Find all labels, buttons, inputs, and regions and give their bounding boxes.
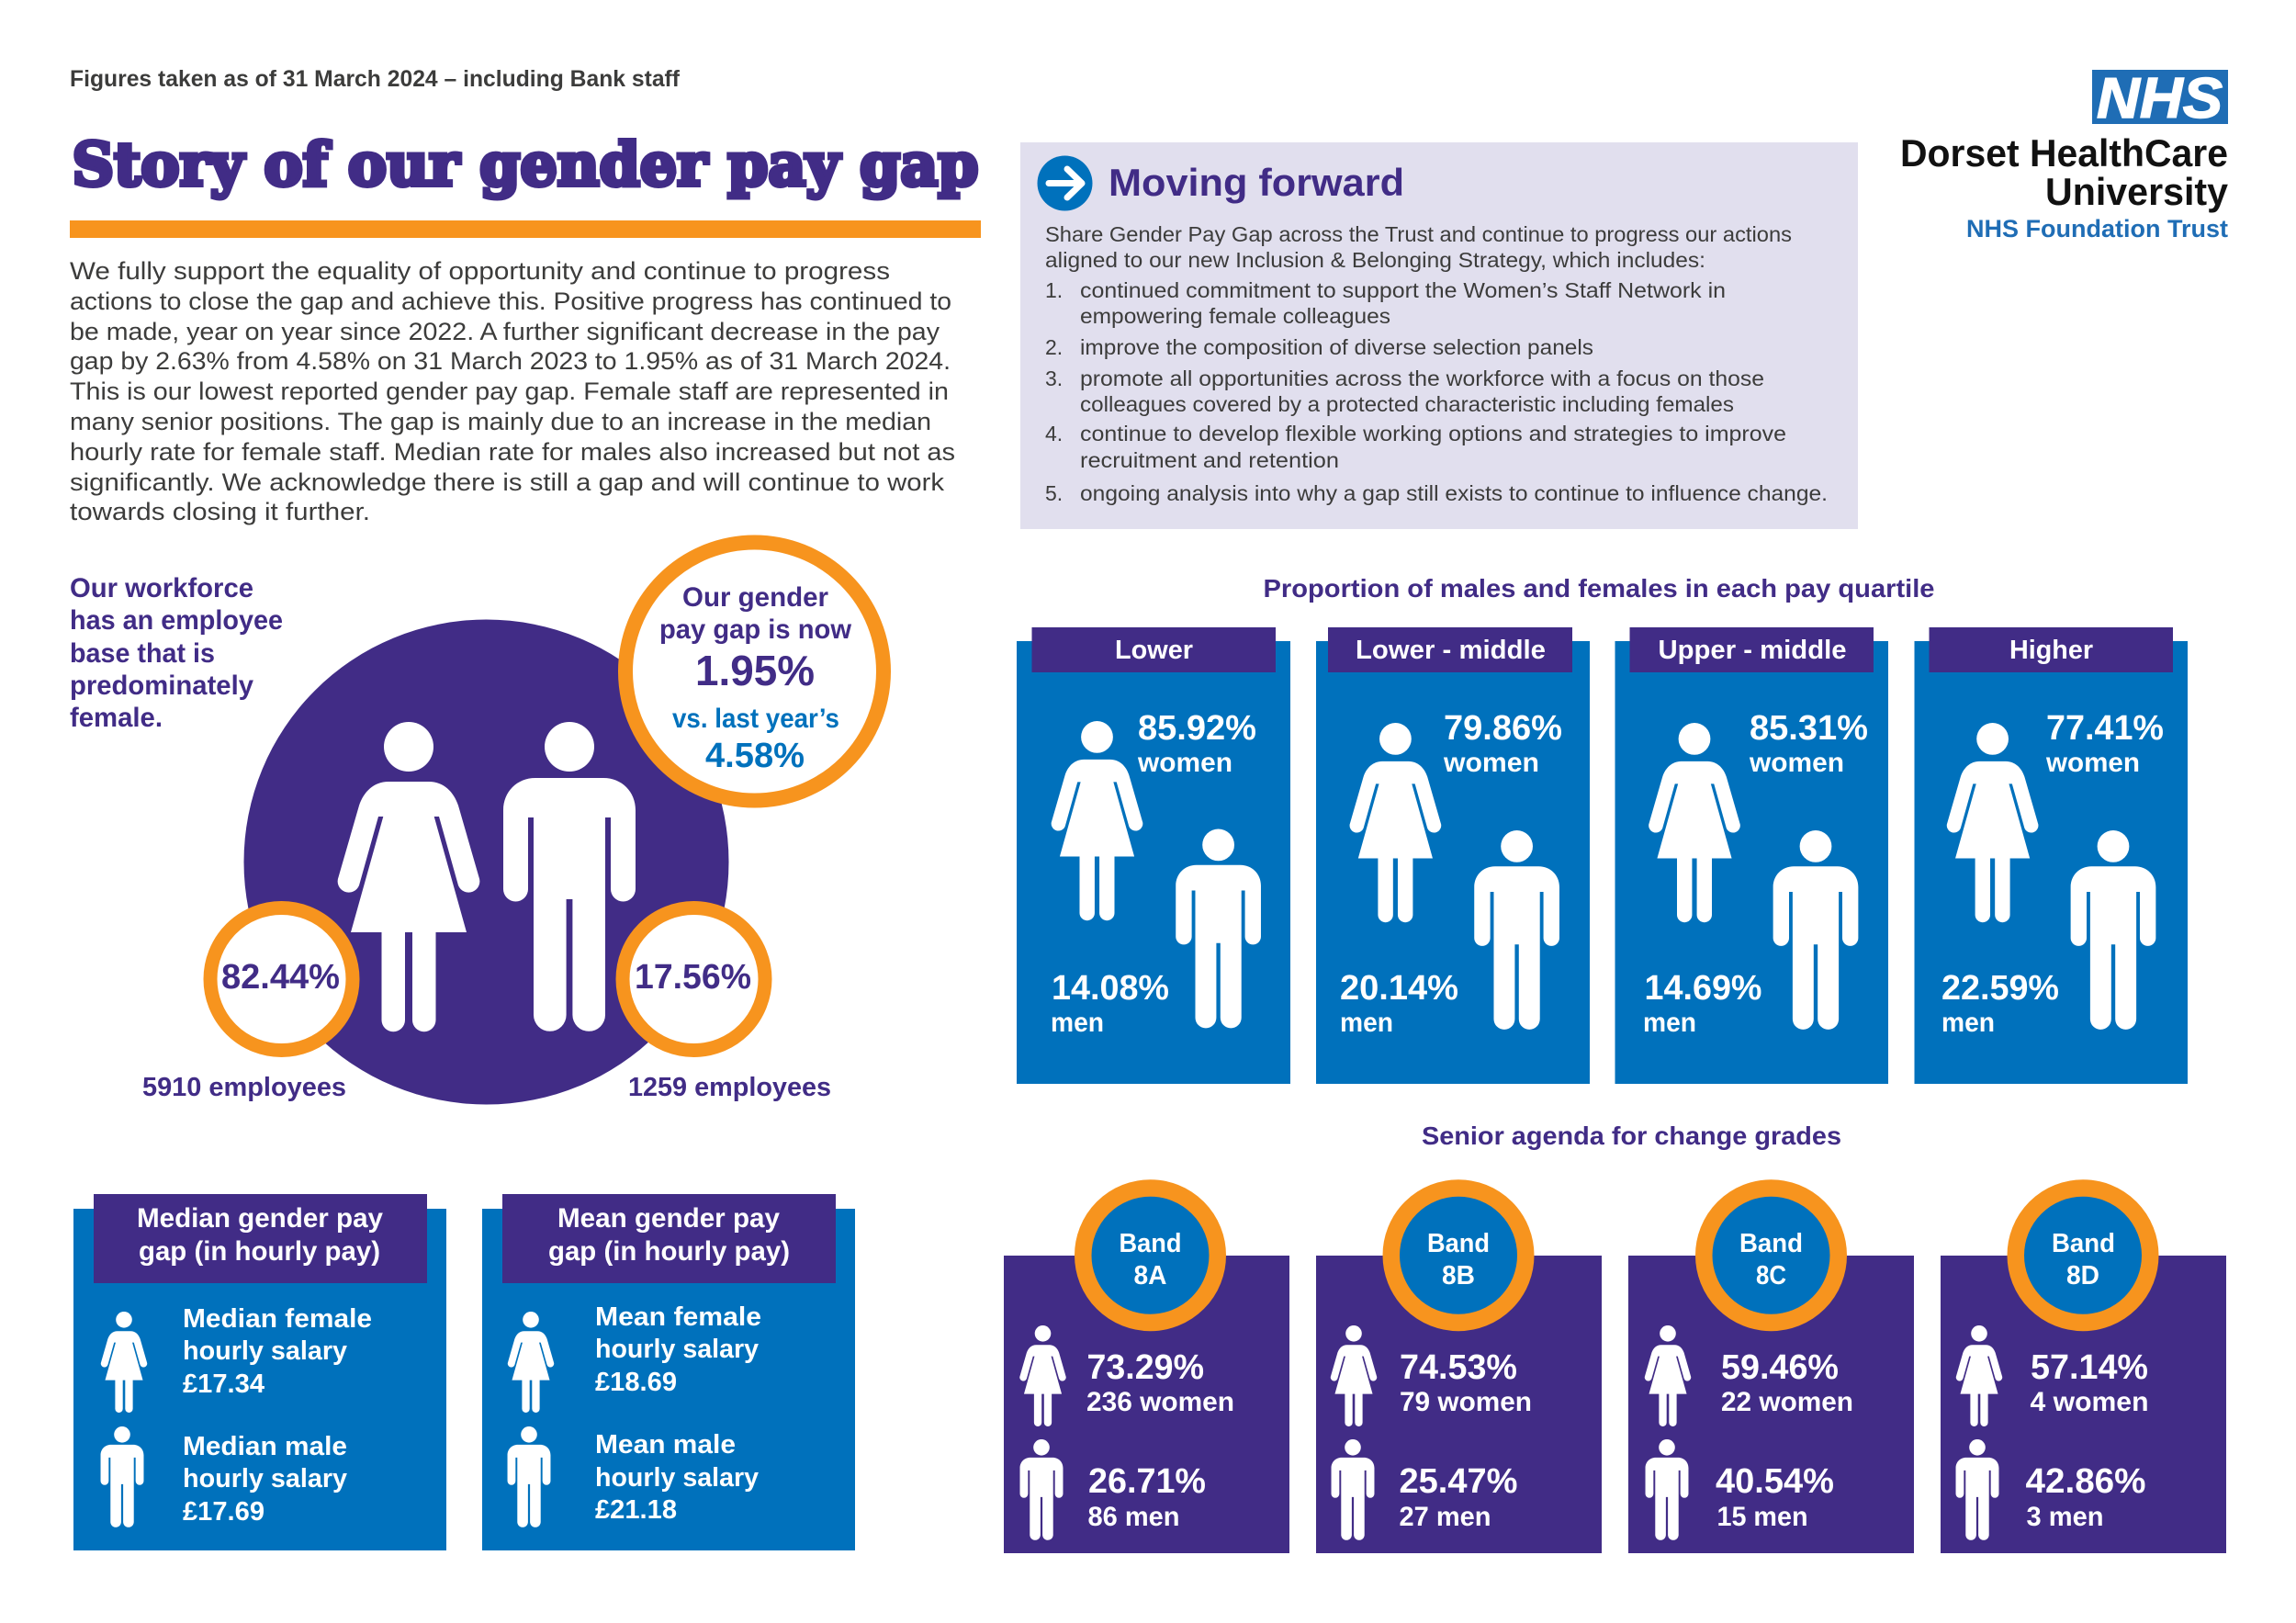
women share: 79 women [1400,1387,1532,1417]
panel: upper-middle quartile [1615,627,1888,1084]
men share: 14.08% [1052,969,1169,1008]
intro paragraph [70,257,955,525]
callout: gender pay gap now: 1.95% [695,647,815,694]
callout: female share: 82.44% [221,958,340,997]
female employees count: 5910 employees [142,1073,346,1102]
male salary: Mean male [595,1430,736,1460]
workforce statement: has an employee [70,605,283,636]
men share: men [1643,1008,1696,1038]
women share: 85.31% [1750,709,1868,748]
men share: 27 men [1400,1502,1491,1532]
men share [1941,969,2059,1038]
callout: gender pay gap now: 4.58% [705,737,805,775]
logo: NHS Dorset HealthCare: Dorset HealthCare [1900,131,2228,175]
icon: woman [1956,1325,2002,1426]
icon: woman [1052,721,1142,920]
band badge: Band [1427,1229,1490,1258]
panel: lower-middle quartile [1316,627,1590,1084]
men share [1643,969,1761,1038]
moving forward text: continued commitment to support the Women’s Staff Network in [1080,278,1726,302]
men share: men [1051,1008,1104,1038]
icon: man [1956,1439,1998,1540]
logo: NHS Dorset HealthCare: NHS [2097,67,2223,130]
callout: male share: 17.56% [635,958,751,997]
icon: man [1646,1439,1688,1540]
workforce statement: female. [70,703,163,733]
women share: 79.86% [1444,709,1562,748]
men share: 25.47% [1400,1462,1517,1501]
female salary [183,1304,372,1399]
intro paragraph: gap by 2.63% from 4.58% on 31 March 2023 to 1.95% as of 31 March 2024. [70,347,951,375]
panel: median pay gap [73,1194,446,1550]
men share [1400,1462,1517,1532]
men share: 14.69% [1644,969,1761,1008]
female salary: hourly salary [183,1336,347,1366]
panel: median pay gap: gap (in hourly pay) [139,1236,380,1267]
intro paragraph: be made, year on year since 2022. A further significant decrease in the pay [70,318,940,345]
panel: band 8D [1941,1188,2226,1553]
callout: female share [210,907,353,1051]
panel: mean pay gap: Mean gender pay [557,1203,780,1234]
band badge [1391,1188,1525,1323]
male salary: £17.69 [183,1497,264,1527]
moving forward heading: Moving forward [1109,161,1404,204]
panel: upper-middle quartile: Upper - middle [1659,636,1846,665]
workforce statement: Our workforce [70,573,253,603]
workforce circle graphic [210,542,884,1104]
moving forward text: continue to develop flexible working options and strategies to improve [1080,422,1786,445]
band badge: Band [1119,1229,1181,1258]
icon: large man [503,722,636,1031]
icon: woman [1350,723,1441,922]
band badge [2016,1188,2150,1323]
icon: woman [1649,723,1740,922]
moving forward text: improve the composition of diverse selection panels [1080,335,1593,359]
panel: moving forward [1020,142,1858,529]
intro paragraph: This is our lowest reported gender pay gap. Female staff are represented in [70,378,949,405]
men share: 22.59% [1941,969,2059,1008]
panel: lower quartile: Lower [1115,636,1193,665]
icon: man [1773,830,1858,1030]
panel: higher quartile [1914,627,2188,1084]
icon: woman [1947,723,2038,922]
logo: NHS Dorset HealthCare: University [2045,170,2229,213]
band badge: 8C [1756,1261,1786,1291]
women share: women [1137,748,1232,778]
men share: 20.14% [1340,969,1458,1008]
panel: band 8C [1628,1188,1914,1553]
female salary: £17.34 [183,1369,264,1399]
women share [1443,709,1562,778]
women share [1749,709,1868,778]
men share: 26.71% [1088,1462,1206,1501]
women share [1086,1348,1234,1417]
icon: man [508,1426,550,1527]
moving forward text: colleagues covered by a protected characteristic including females [1080,392,1734,416]
moving forward text: promote all opportunities across the workforce with a focus on those [1080,366,1764,390]
women share: 22 women [1721,1387,1853,1417]
men share: 42.86% [2026,1462,2145,1501]
icon: man [1176,828,1261,1028]
intro paragraph: hourly rate for female staff. Median rate for males also increased but not as [70,438,955,466]
heading: pay quartile: Proportion of males and females in each pay quartile [1264,574,1934,603]
female salary: Mean female [595,1302,761,1332]
moving forward text: 5. [1045,481,1063,505]
men share: men [1340,1008,1393,1038]
band badge: Band [2052,1229,2115,1258]
callout: gender pay gap now [625,542,884,801]
women share: women [1443,748,1539,778]
moving forward text [1045,222,1828,505]
band badge: 8B [1442,1261,1475,1291]
men share: men [1941,1008,1995,1038]
workforce statement [70,573,283,733]
moving forward text: Share Gender Pay Gap across the Trust and continue to progress our actions [1045,222,1792,246]
workforce statement: base that is [70,638,215,669]
male salary: £21.18 [595,1495,677,1525]
female salary: hourly salary [595,1335,759,1364]
band badge: 8D [2066,1261,2099,1291]
icon: arrow in circle [1038,156,1093,211]
women share: 236 women [1086,1387,1234,1417]
men share: 86 men [1087,1502,1179,1532]
panel: median pay gap: Median gender pay [137,1203,383,1234]
icon: man [1020,1439,1063,1540]
band badge: Band [1739,1229,1803,1258]
panel: lower-middle quartile: Lower - middle [1356,636,1546,665]
intro paragraph: We fully support the equality of opportunity and continue to progress [70,257,890,285]
women share: 57.14% [2031,1348,2148,1387]
men share [1716,1462,1834,1532]
men share [1340,969,1458,1038]
title underline [70,220,981,238]
men share: 15 men [1717,1502,1807,1532]
men share [1087,1462,1206,1532]
men share: 3 men [2026,1502,2103,1532]
band badge [1083,1188,1218,1323]
band badge: 8A [1133,1261,1167,1291]
male salary: hourly salary [183,1464,347,1493]
male salary [595,1430,759,1525]
icon: man [1474,830,1559,1030]
moving forward text: 3. [1045,366,1063,390]
icon: man [2071,830,2155,1030]
moving forward text: 4. [1045,422,1063,445]
moving forward text: aligned to our new Inclusion & Belonging Strategy, which includes: [1045,248,1705,272]
intro paragraph: many senior positions. The gap is mainly due to an increase in the median [70,408,931,435]
logo: NHS Dorset HealthCare: NHS Foundation Trust [1966,215,2228,242]
icon: woman [1645,1325,1691,1426]
women share [1721,1348,1853,1417]
female salary [595,1302,761,1397]
icon: woman [1019,1325,1066,1426]
band badge [1704,1188,1839,1323]
women share: women [1749,748,1844,778]
women share: 4 women [2030,1387,2149,1417]
title: Story of our gender pay gap [72,130,979,200]
women share: 59.46% [1721,1348,1839,1387]
panel: mean pay gap: gap (in hourly pay) [548,1236,790,1267]
panel: band 8A [1004,1188,1289,1553]
moving forward text: empowering female colleagues [1080,304,1390,328]
icon: woman [1331,1325,1377,1426]
callout: gender pay gap now: pay gap is now [659,614,852,645]
icon: woman [508,1312,554,1413]
intro paragraph: actions to close the gap and achieve this. Positive progress has continued to [70,287,951,315]
women share: 74.53% [1400,1348,1517,1387]
moving forward text: ongoing analysis into why a gap still exists to continue to influence change. [1080,481,1828,505]
male salary: Median male [183,1432,347,1461]
women share [1400,1348,1532,1417]
icon: woman [101,1312,147,1413]
women share: 85.92% [1138,709,1256,748]
women share [1137,709,1256,778]
icon: man [1332,1439,1374,1540]
heading: senior grades: Senior agenda for change grades [1422,1121,1841,1150]
moving forward text: recruitment and retention [1080,448,1339,472]
men share: 40.54% [1716,1462,1834,1501]
date note: Figures taken as of 31 March 2024 – including Bank staff [70,66,681,92]
women share: 77.41% [2046,709,2164,748]
women share [2030,1348,2149,1417]
male salary [183,1432,347,1527]
panel: mean pay gap [482,1194,855,1550]
women share: 73.29% [1087,1348,1204,1387]
moving forward text: 2. [1045,335,1063,359]
panel: band 8B [1316,1188,1602,1553]
icon: man [101,1426,143,1527]
callout: gender pay gap now: Our gender [682,582,828,613]
intro paragraph: significantly. We acknowledge there is still a gap and will continue to work [70,468,945,496]
male salary: hourly salary [595,1463,759,1493]
callout: gender pay gap now: vs. last year’s [672,704,839,734]
men share [1051,969,1169,1038]
panel: lower quartile [1017,627,1290,1084]
icon: large woman [338,722,479,1031]
workforce statement: predominately [70,671,253,701]
women share: women [2045,748,2140,778]
men share [2026,1462,2145,1532]
intro paragraph: towards closing it further. [70,498,370,525]
logo: NHS Dorset HealthCare [1900,67,2229,242]
moving forward text: 1. [1045,278,1063,302]
female salary: £18.69 [595,1368,677,1397]
male employees count: 1259 employees [628,1073,831,1102]
panel: higher quartile: Higher [2009,636,2093,665]
women share [2045,709,2164,778]
callout: male share [623,907,765,1051]
female salary: Median female [183,1304,372,1334]
